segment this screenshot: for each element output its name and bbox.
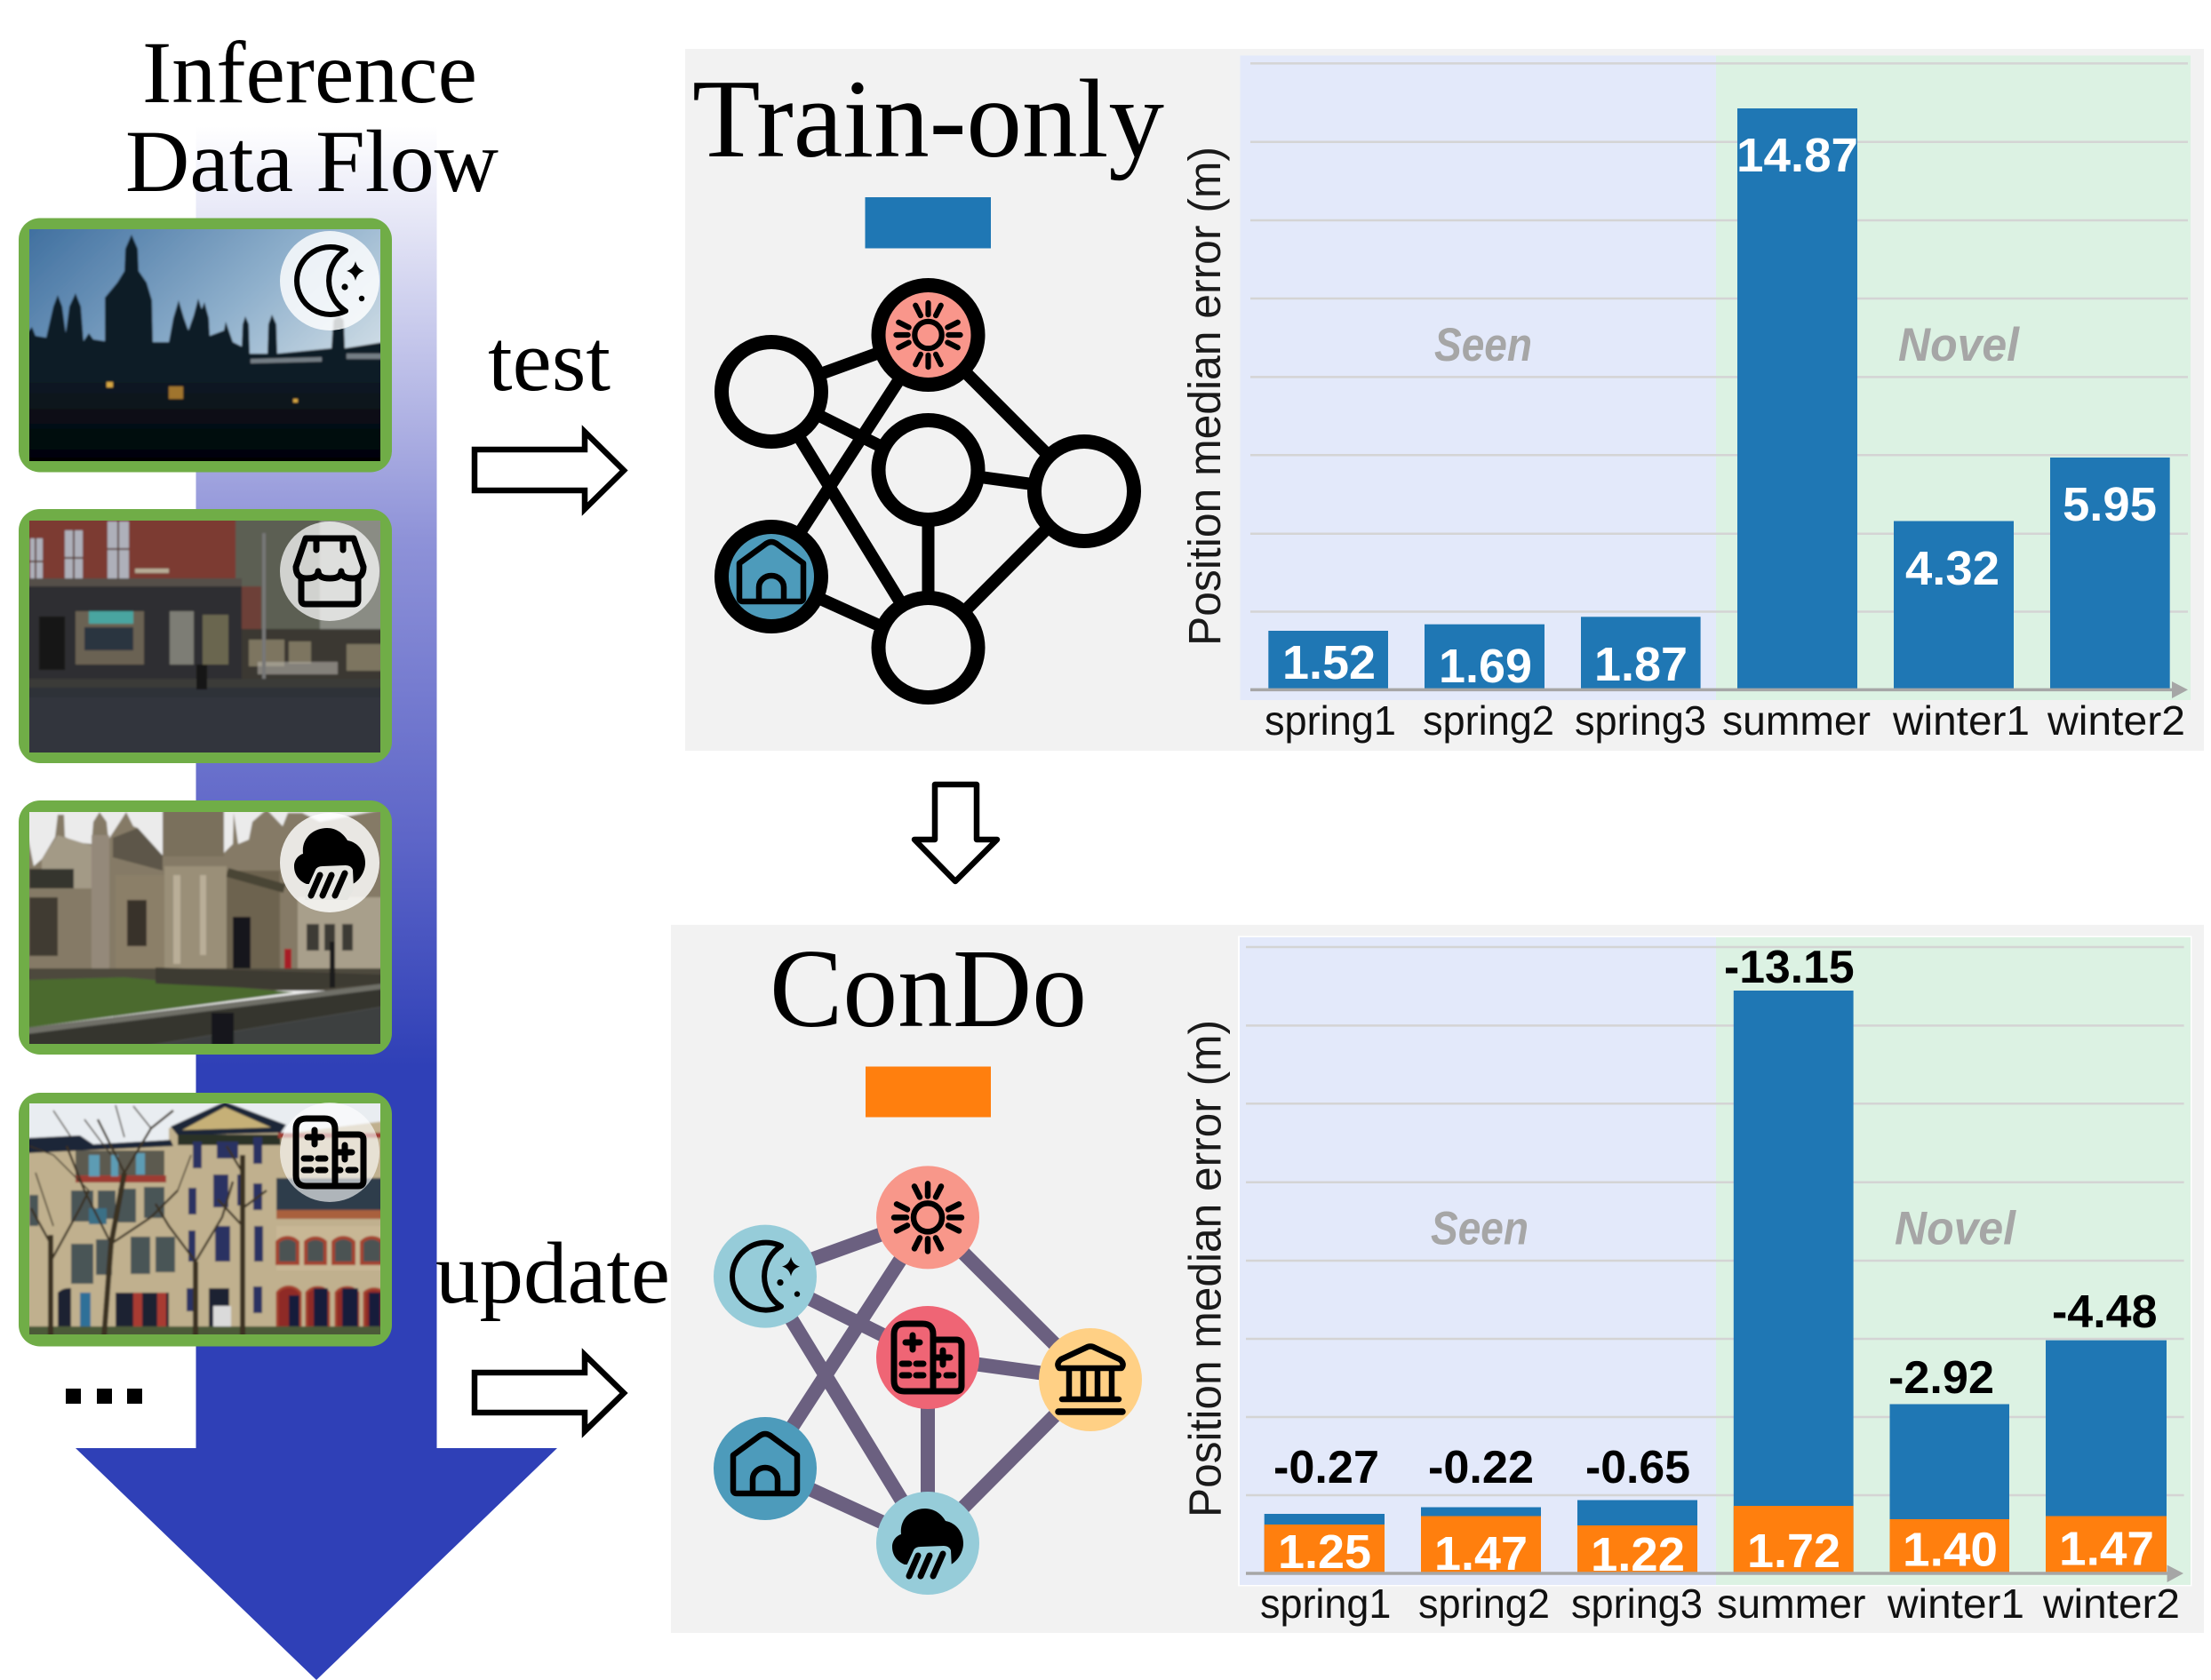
image card: ornate building with trees <box>19 1093 392 1347</box>
ConDo title: ConDo <box>770 928 1087 1051</box>
improvement values <box>1273 942 2158 1493</box>
bar chart: train-only <box>1241 55 2191 744</box>
region label: novel: Novel <box>1895 1203 2016 1255</box>
icon: home node <box>739 542 803 601</box>
category labels: spring2 <box>1418 1580 1550 1627</box>
label: update: update <box>435 1225 670 1322</box>
orange bar values: 1.40 <box>1903 1523 1998 1576</box>
bars <box>1268 108 2170 689</box>
Train-only title: Train-only <box>692 58 1164 181</box>
node: home <box>714 1417 817 1520</box>
category labels: spring2 <box>1423 697 1554 744</box>
bar values <box>1282 129 2157 693</box>
improvement values: -0.65 <box>1585 1442 1690 1493</box>
image card: college building and lawn <box>19 800 392 1055</box>
category labels <box>1260 1580 2180 1627</box>
region label: novel: Novel <box>1898 319 2020 371</box>
orange bars <box>1265 1506 2167 1573</box>
bar values: 4.32 <box>1905 542 1999 595</box>
orange bar values: 1.25 <box>1278 1525 1371 1579</box>
improvement values: -0.22 <box>1428 1442 1534 1493</box>
x axis <box>1250 681 2188 698</box>
improvement values: -4.48 <box>2052 1286 2158 1338</box>
arrow: down between panels <box>914 784 997 881</box>
node: buildings <box>876 1306 979 1409</box>
network diagram: ConDo <box>714 1166 1142 1595</box>
bar values: 5.95 <box>2063 478 2157 531</box>
bar values: 14.87 <box>1736 129 1858 182</box>
category labels: spring3 <box>1571 1580 1703 1627</box>
image card: shop street <box>19 509 392 763</box>
bar values: 1.87 <box>1594 638 1688 691</box>
bar chart: ConDo <box>1238 936 2191 1627</box>
blue bars <box>1265 991 2167 1573</box>
heading: Inference Data Flow: Inference <box>142 23 477 122</box>
image card: night scene <box>19 219 392 473</box>
category labels: summer <box>1717 1580 1866 1627</box>
icon: sun node <box>896 303 961 367</box>
category labels: summer <box>1722 697 1871 744</box>
category labels: spring1 <box>1265 697 1396 744</box>
label: test: test <box>488 313 611 410</box>
improvement values: -0.27 <box>1273 1442 1379 1493</box>
category labels: winter1 <box>1887 1580 2024 1627</box>
icon: rain cloud <box>280 813 379 912</box>
orange bar values: 1.22 <box>1591 1528 1685 1581</box>
orange bar values: 1.72 <box>1747 1525 1840 1578</box>
node: moon <box>714 1225 817 1328</box>
network diagram: train-only <box>722 285 1134 697</box>
arrow: test <box>475 432 624 509</box>
category labels: winter1 <box>1892 697 2030 744</box>
heading: Inference Data Flow: Data Flow <box>125 112 499 211</box>
node: sun <box>876 1166 979 1269</box>
category labels: spring1 <box>1260 1580 1391 1627</box>
icon: buildings <box>280 1103 379 1202</box>
orange bar values: 1.47 <box>1434 1527 1528 1580</box>
y axis label: Position median error (m) <box>1179 147 1230 646</box>
improvement values: -2.92 <box>1888 1352 1994 1404</box>
node: bank <box>1039 1328 1142 1431</box>
category labels <box>1265 697 2185 744</box>
y axis label: Position median error (m) <box>1180 1020 1230 1517</box>
arrow: update <box>475 1355 624 1431</box>
orange bar values <box>1278 1523 2154 1581</box>
node: rain <box>876 1492 979 1595</box>
region label: seen: Seen <box>1431 1203 1529 1255</box>
orange bar values: 1.47 <box>2059 1523 2154 1576</box>
ellipsis marker <box>66 1389 142 1404</box>
icon: store <box>280 522 379 621</box>
panel: Train-only <box>685 49 2204 751</box>
bar values: 1.69 <box>1439 640 1532 693</box>
legend swatch: orange <box>866 1066 991 1118</box>
inference data flow arrow <box>76 126 557 1680</box>
x axis <box>1246 1565 2183 1582</box>
category labels: winter2 <box>2042 1580 2180 1627</box>
category labels: winter2 <box>2047 697 2185 744</box>
bar values: 1.52 <box>1282 636 1376 689</box>
heading: Inference Data Flow <box>125 23 499 211</box>
region label: seen: Seen <box>1434 319 1532 371</box>
panel: ConDo <box>671 925 2204 1633</box>
category labels: spring3 <box>1575 697 1706 744</box>
improvement values: -13.15 <box>1724 942 1855 993</box>
icon: moon <box>280 231 379 330</box>
legend swatch: blue <box>866 197 991 249</box>
